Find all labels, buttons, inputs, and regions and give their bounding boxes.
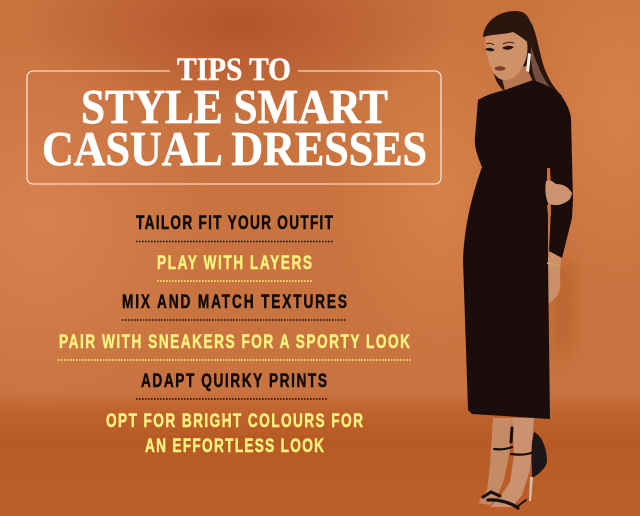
- hair top: [483, 11, 532, 46]
- tip 4 dotted divider: [58, 359, 411, 361]
- earring: [526, 53, 531, 72]
- tip 5: ADAPT QUIRKY PRINTS: [141, 370, 327, 392]
- eyes and lips: [485, 42, 514, 71]
- hair highlight: [531, 46, 552, 90]
- shoe: feather heel back: [532, 432, 547, 478]
- heading: tips to: TIPS TO: [177, 52, 291, 88]
- heading: casual dresses: CASUAL DRESSES: [42, 121, 427, 176]
- tip 6: AN EFFORTLESS LOOK: [145, 435, 324, 457]
- figure: woman in black dress: [463, 11, 573, 508]
- tip 3 dotted divider: [122, 319, 347, 321]
- title frame: [27, 71, 441, 184]
- shoe straps: [483, 428, 531, 508]
- tip 4: PAIR WITH SNEAKERS FOR A SPORTY LOOK: [59, 331, 410, 353]
- shoe: metal heel: [529, 477, 533, 501]
- neck: [500, 66, 533, 91]
- hair behind: [486, 14, 562, 96]
- bracelet: [547, 263, 560, 266]
- tip 1: TAILOR FIT YOUR OUTFIT: [136, 212, 333, 234]
- hand at waist: [545, 180, 572, 205]
- tip 3: MIX AND MATCH TEXTURES: [122, 291, 347, 313]
- tip 6: OPT FOR BRIGHT COLOURS FOR: [106, 410, 363, 432]
- tip 6: [106, 410, 363, 457]
- orange gap between body and arm: [547, 168, 551, 186]
- tip 1 dotted divider: [136, 240, 333, 242]
- tip 5 dotted divider: [136, 398, 327, 400]
- lower hand: [539, 250, 562, 307]
- figure shadow on backdrop: [552, 260, 572, 370]
- tip 2: PLAY WITH LAYERS: [157, 252, 312, 274]
- heading: style smart: STYLE SMART: [81, 79, 388, 134]
- legs: [478, 418, 512, 505]
- tips list: [58, 212, 411, 457]
- face: [485, 31, 527, 80]
- black dress body: [463, 80, 573, 419]
- title block: [27, 52, 441, 184]
- tip 2 dotted divider: [157, 280, 312, 282]
